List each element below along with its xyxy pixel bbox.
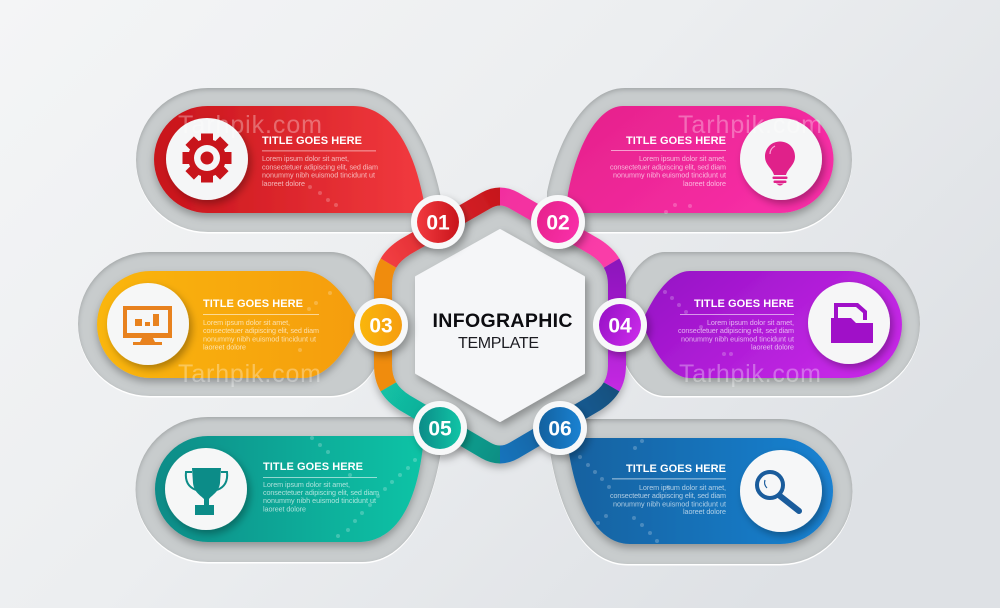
watermark text: Tarhpik.com xyxy=(178,111,322,139)
central hexagon xyxy=(416,230,584,421)
ring segment orange xyxy=(383,263,388,387)
panel 03 coloured card xyxy=(97,271,359,378)
panel 02 text: TITLE GOES HERE xyxy=(626,135,726,147)
panel 05 xyxy=(136,417,442,562)
panel 04 text: TITLE GOES HERE xyxy=(694,298,794,310)
panel 03 text: laoreet dolore xyxy=(203,342,246,352)
panel 06 text: consectetuer adipiscing elit, sed diam xyxy=(610,491,726,500)
number badge 02 xyxy=(531,195,585,249)
panel 04 icon badge xyxy=(808,282,890,364)
panel 06 text xyxy=(610,463,726,516)
panel 02 xyxy=(547,88,852,232)
panel 01 text: laoreet dolore xyxy=(262,179,305,188)
panel 03 text xyxy=(203,298,319,352)
panel 06 xyxy=(549,419,852,564)
panel 03 xyxy=(78,252,376,396)
panel 05 icon badge xyxy=(165,448,247,530)
number badge 05 xyxy=(413,401,467,455)
panel 04 xyxy=(626,252,920,396)
panel 03 text: nonummy nibh euismod tincidunt ut xyxy=(203,334,316,344)
panel 03 text: consectetuer adipiscing elit, sed diam xyxy=(203,326,319,335)
ring segment pink xyxy=(500,196,612,263)
panel 01 xyxy=(136,88,441,232)
panel 02 well xyxy=(547,88,852,232)
number badge 06: 06 xyxy=(548,418,572,440)
decorative dots watermark xyxy=(298,185,733,543)
icon: gear xyxy=(182,134,232,182)
panel 02 text: consectetuer adipiscing elit, sed diam xyxy=(610,162,726,172)
number badge 05: 05 xyxy=(428,418,452,440)
watermark text xyxy=(178,111,822,388)
panel 02 text: nonummy nibh euismod tincidunt ut xyxy=(613,170,726,180)
icon: trophy xyxy=(186,468,227,515)
panel 06 text: Lorem ipsum dolor sit amet, xyxy=(639,483,726,492)
number badge 03: 03 xyxy=(369,314,393,338)
panel 02 coloured card xyxy=(566,106,833,213)
panel 04 text: Lorem ipsum dolor sit amet, xyxy=(707,318,794,327)
panel 04 text: consectetuer adipiscing elit, sed diam xyxy=(678,326,794,335)
panel 05 text: consectetuer adipiscing elit, sed diam xyxy=(263,488,379,497)
panel 05 text: nonummy nibh euismod tincidunt ut xyxy=(263,496,376,505)
panel 01 well xyxy=(136,88,441,232)
panel 04 text: laoreet dolore xyxy=(751,342,794,352)
panel 01 icon badge xyxy=(166,118,248,200)
ring segment purple xyxy=(612,263,617,387)
ring segment red xyxy=(388,196,500,263)
panel 06 well xyxy=(549,419,852,564)
panel 01 text: consectetuer adipiscing elit, sed diam xyxy=(262,162,378,172)
ring segment blue xyxy=(500,387,612,454)
panel 04 text xyxy=(678,298,794,352)
panel 01 text: Lorem ipsum dolor sit amet, xyxy=(262,154,349,163)
panel 01 coloured card xyxy=(154,106,426,213)
hexagonal well behind ring xyxy=(387,197,613,453)
central subtitle: TEMPLATE xyxy=(458,335,539,352)
panel 03 well xyxy=(78,252,376,396)
watermark text: Tarhpik.com xyxy=(178,360,321,388)
panel 05 text: Lorem ipsum dolor sit amet, xyxy=(263,480,350,489)
panel 05 coloured card xyxy=(155,436,424,542)
panel 03 text: Lorem ipsum dolor sit amet, xyxy=(203,318,290,327)
panel 02 text: Lorem ipsum dolor sit amet, xyxy=(639,154,726,163)
watermark text: Tarhpik.com xyxy=(678,111,822,139)
panel 04 coloured card xyxy=(642,271,902,378)
panel 01 text: nonummy nibh euismod tincidunt ut xyxy=(262,170,375,180)
panel 06 coloured card xyxy=(567,438,833,544)
number badge 06 xyxy=(533,401,587,455)
watermark text: Tarhpik.com xyxy=(679,360,821,388)
panel 04 well xyxy=(626,252,920,396)
number badge 04: 04 xyxy=(608,314,632,338)
ring segment teal xyxy=(388,387,500,454)
icon: magnifier xyxy=(757,472,799,511)
number badge 01 xyxy=(411,195,465,249)
central title: INFOGRAPHIC xyxy=(432,310,572,332)
panel 03 text: TITLE GOES HERE xyxy=(203,298,303,310)
icon: folder xyxy=(831,303,873,343)
number badge 01: 01 xyxy=(426,212,450,234)
number badge 02: 02 xyxy=(546,212,570,234)
panel 05 text xyxy=(263,461,379,514)
panel 02 text xyxy=(610,135,726,188)
panel 02 icon badge xyxy=(740,118,822,200)
number badge 03 xyxy=(354,298,408,352)
panel 03 icon badge xyxy=(107,283,189,365)
icon: light bulb xyxy=(765,142,795,186)
icon: monitor xyxy=(123,306,172,345)
panel 02 text: laoreet dolore xyxy=(683,179,726,188)
panel 05 well xyxy=(136,417,442,562)
panel 05 text: TITLE GOES HERE xyxy=(263,461,363,473)
panel 01 text: TITLE GOES HERE xyxy=(262,135,362,147)
panel 06 text: TITLE GOES HERE xyxy=(626,463,726,475)
panel 06 text: laoreet dolore xyxy=(683,507,726,516)
panel 06 icon badge xyxy=(740,450,822,532)
panel 05 text: laoreet dolore xyxy=(263,504,306,514)
panel 06 text: nonummy nibh euismod tincidunt ut xyxy=(613,500,726,508)
panel 04 text: nonummy nibh euismod tincidunt ut xyxy=(681,334,794,344)
number badge 04 xyxy=(593,298,647,352)
panel 01 text xyxy=(262,135,378,188)
ring around central hexagon xyxy=(383,196,617,454)
